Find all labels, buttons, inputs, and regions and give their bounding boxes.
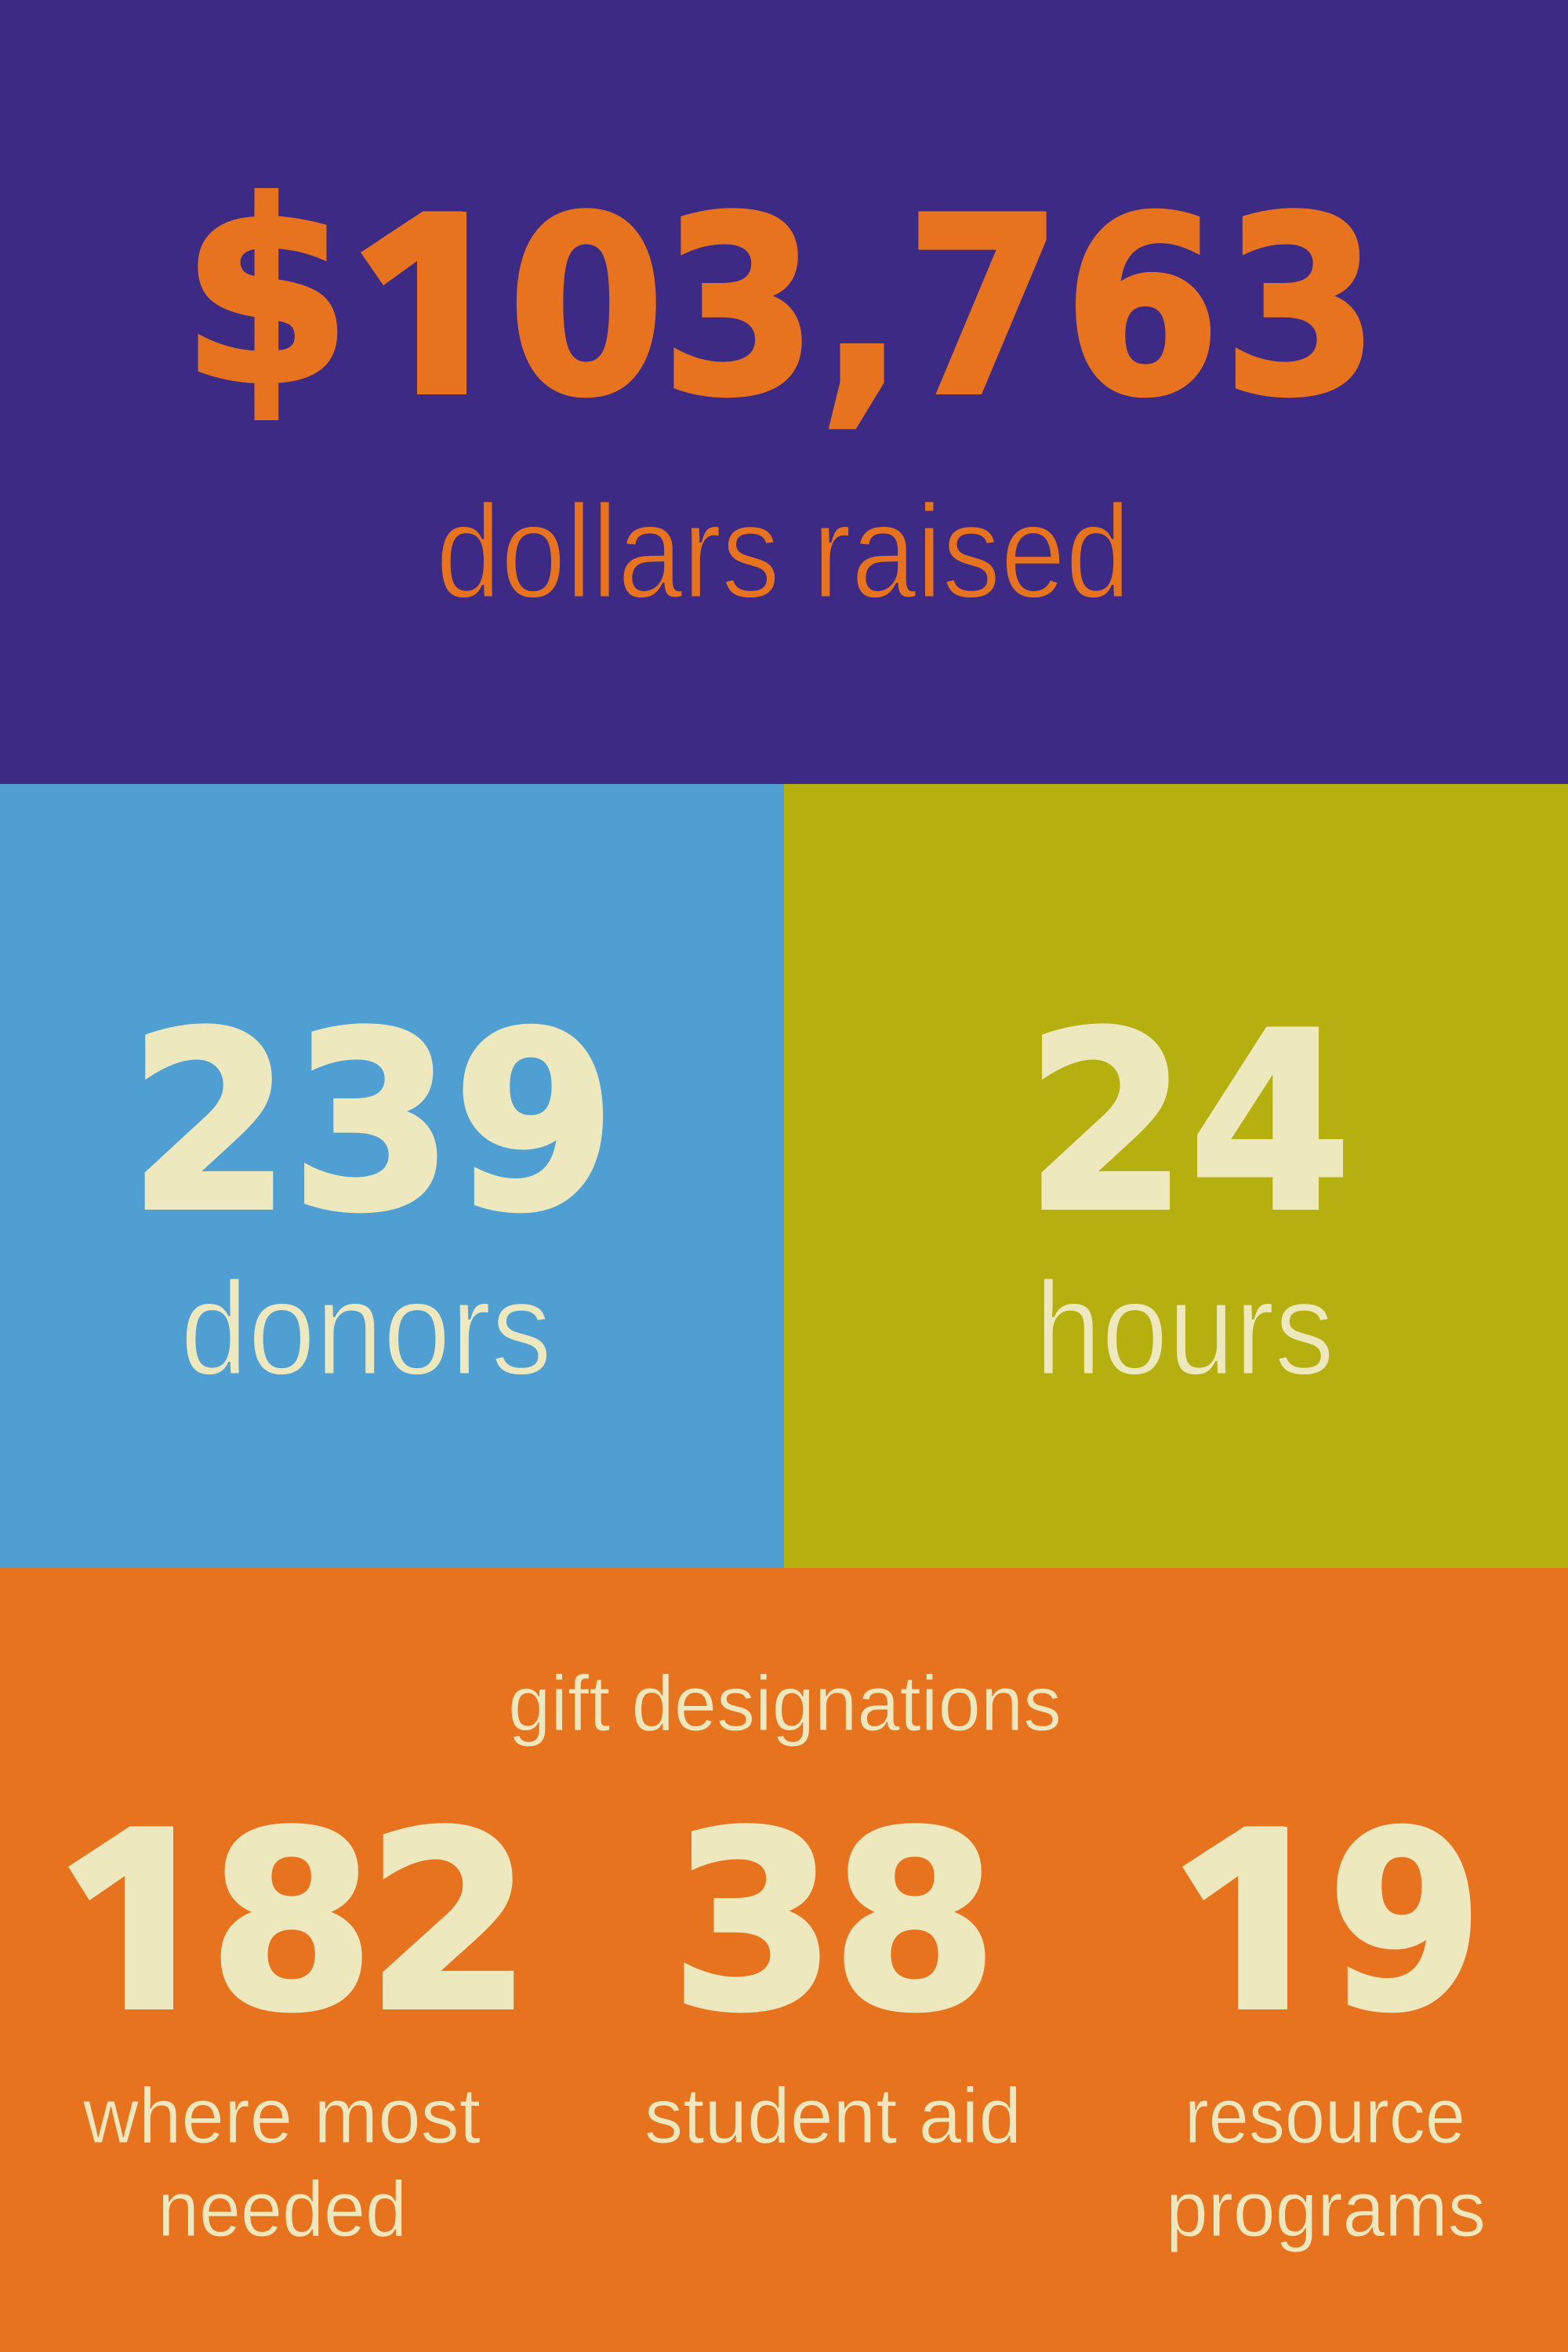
panel: donors [0, 784, 784, 1568]
label: resource programs [1166, 2072, 1486, 2253]
number: 38: 38 [670, 1780, 997, 2065]
label: donors: donors [180, 1254, 552, 1403]
label: where most needed: needed [158, 2165, 407, 2253]
headline number: $103,763: $ [181, 148, 352, 441]
number: 19: 19 [1179, 1780, 1483, 2065]
number: 239: 239 [129, 981, 615, 1265]
label: resource programs: resource [1185, 2072, 1465, 2160]
number: 182: 182 [60, 1780, 532, 2065]
label: hours: hours [1035, 1254, 1334, 1403]
number: 24: 24 [1025, 981, 1352, 1265]
label: dollars raised: dollars raised [436, 477, 1131, 626]
label: where most needed [82, 2072, 481, 2253]
label: student aid: student aid [644, 2072, 1022, 2160]
panel: gift designations [0, 1568, 1568, 2352]
panel: dollars raised [0, 0, 1568, 784]
heading: gift designations: gift designations [508, 1660, 1062, 1748]
panel: hours [784, 784, 1568, 1568]
label: resource programs: programs [1166, 2165, 1486, 2253]
label: where most needed: where most [82, 2072, 481, 2160]
headline number: $103,763: 103,763 [357, 165, 1379, 450]
